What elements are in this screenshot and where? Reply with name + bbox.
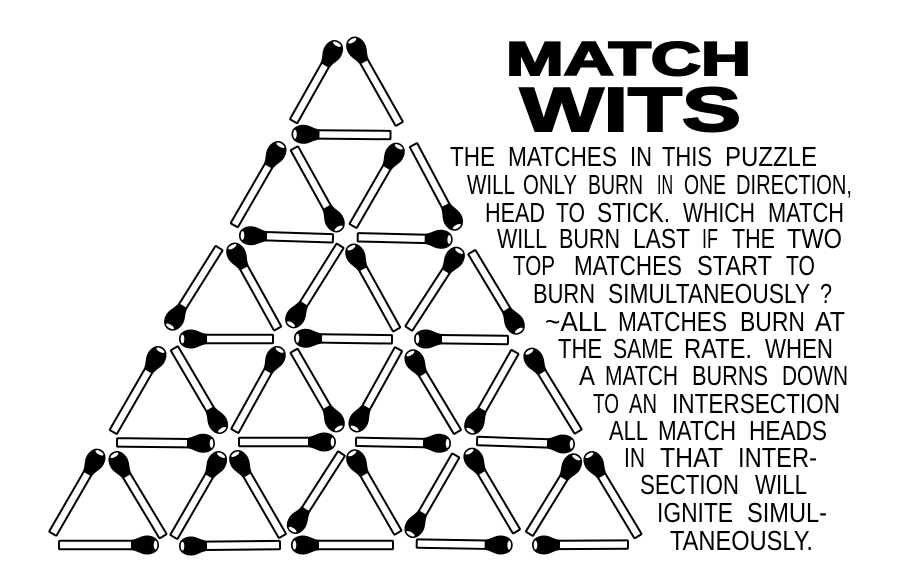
match 42 [179, 536, 280, 556]
puzzle instructions text block: MATCHES [574, 250, 682, 281]
match 35 [283, 448, 350, 538]
match 27 [117, 433, 215, 453]
puzzle instructions text block: BURNS [692, 360, 768, 391]
match 25 [460, 347, 523, 438]
puzzle instructions text block: THE [450, 141, 495, 172]
puzzle instructions text block: START [697, 250, 772, 281]
puzzle instructions text block: INTER- [738, 442, 817, 473]
puzzle instructions text block: WHICH [683, 197, 755, 228]
match 17 [294, 329, 392, 349]
match 14 [401, 243, 469, 334]
match 8 [239, 226, 333, 248]
match 29 [356, 432, 451, 453]
title line: WITS: WITS [520, 76, 741, 145]
puzzle instructions text block: THE [732, 223, 775, 254]
match 28 [239, 432, 336, 452]
match 13 [341, 240, 405, 334]
puzzle instructions text block: TWO [787, 223, 842, 254]
match 23 [345, 345, 407, 436]
puzzle instructions text block: TOP [513, 250, 555, 281]
match 15 [464, 247, 529, 338]
puzzle instructions text block: MATCHES [508, 141, 617, 172]
puzzle instructions text block: BURN [533, 278, 595, 309]
puzzle instructions text block: IN [657, 169, 673, 200]
puzzle instructions text block: TO [556, 197, 585, 228]
puzzle instructions text block: HEADS [749, 415, 827, 446]
match 36 [342, 446, 406, 537]
puzzle instructions text block: TO [786, 250, 815, 281]
puzzle instructions text block: SIMUL- [747, 497, 827, 528]
puzzle instructions text block: MATCH [605, 360, 678, 391]
puzzle instructions text block: INTERSECTION [672, 388, 840, 419]
match 30 [477, 431, 575, 454]
match 44 [417, 534, 513, 555]
match 20 [166, 343, 232, 438]
puzzle instructions text block: MATCHES [618, 306, 727, 337]
puzzle instructions text block: THAT [660, 442, 723, 473]
match 34 [225, 446, 291, 541]
match 9 [357, 228, 453, 249]
puzzle instructions text block: BURN [740, 306, 805, 337]
puzzle instructions text block: WHEN [765, 333, 833, 364]
match 37 [401, 451, 464, 542]
puzzle instructions text block: ONLY [523, 169, 577, 200]
puzzle instructions text block: STICK. [597, 197, 670, 228]
match 39 [521, 450, 586, 539]
puzzle instructions text block: MATCH [768, 197, 844, 228]
puzzle instructions text block: SAME [613, 333, 673, 364]
match 4 [226, 137, 290, 230]
puzzle instructions text block: IN [630, 141, 652, 172]
puzzle instructions text block: MATCH [658, 415, 736, 446]
match 3 [291, 125, 391, 145]
title line: MATCH: MATCH [506, 32, 751, 85]
match 33 [166, 447, 231, 542]
puzzle instructions text block: A [579, 360, 596, 391]
puzzle instructions text block: THIS [662, 141, 712, 172]
match 32 [104, 447, 171, 541]
puzzle instructions text block: WILL [755, 469, 807, 500]
match 26 [519, 344, 586, 437]
puzzle instructions text block: SECTION [640, 469, 739, 500]
puzzle instructions text block: ONE [684, 169, 726, 200]
puzzle instructions text block: AT [815, 306, 845, 337]
puzzle instructions text block: TO [593, 388, 619, 419]
puzzle instructions text block: HEAD [485, 197, 545, 228]
puzzle instructions text block: THE [558, 333, 602, 364]
match 1 [285, 36, 347, 126]
puzzle instructions text block: BURN [588, 169, 643, 200]
match 21 [226, 342, 290, 436]
match 40 [579, 447, 646, 541]
match 10 [160, 243, 227, 334]
puzzle instructions text block: WILL [467, 169, 515, 200]
puzzle instructions text block: RATE. [684, 333, 752, 364]
match 16 [179, 330, 273, 348]
match 18 [414, 329, 508, 350]
puzzle instructions text block: ~ALL [545, 306, 607, 337]
match 43 [291, 536, 393, 554]
match 7 [405, 140, 467, 234]
puzzle instructions text block: DOWN [782, 360, 848, 391]
match 6 [345, 139, 409, 231]
match 12 [281, 241, 348, 332]
puzzle instructions text block: AN [629, 388, 657, 419]
puzzle instructions text block: IGNITE [657, 497, 733, 528]
match 24 [400, 346, 466, 437]
puzzle instructions text block: PUZZLE [725, 141, 817, 172]
puzzle instructions text block: LAST [633, 223, 690, 254]
puzzle instructions text block: TANEOUSLY. [670, 525, 813, 556]
matchstick triangle puzzle [44, 33, 646, 556]
match 41 [59, 536, 159, 554]
title [506, 32, 751, 145]
match 31 [44, 445, 109, 539]
match 38 [460, 444, 525, 536]
match 19 [105, 342, 170, 437]
puzzle instructions text block: SIMULTANEOUSLY [608, 278, 810, 309]
match 5 [286, 144, 349, 236]
puzzle instructions text block: IF [702, 223, 718, 254]
puzzle instructions text block: DIRECTION, [736, 169, 852, 200]
puzzle instructions text block: ? [820, 278, 832, 309]
puzzle instructions text block [450, 141, 852, 556]
match 45 [532, 535, 628, 555]
match 22 [286, 346, 349, 436]
puzzle instructions text block: ALL [609, 415, 648, 446]
puzzle instructions text block: BURN [559, 223, 620, 254]
match 2 [342, 33, 408, 129]
puzzle instructions text block: WILL [497, 223, 547, 254]
puzzle instructions text block: IN [624, 442, 645, 473]
match 11 [222, 239, 286, 333]
